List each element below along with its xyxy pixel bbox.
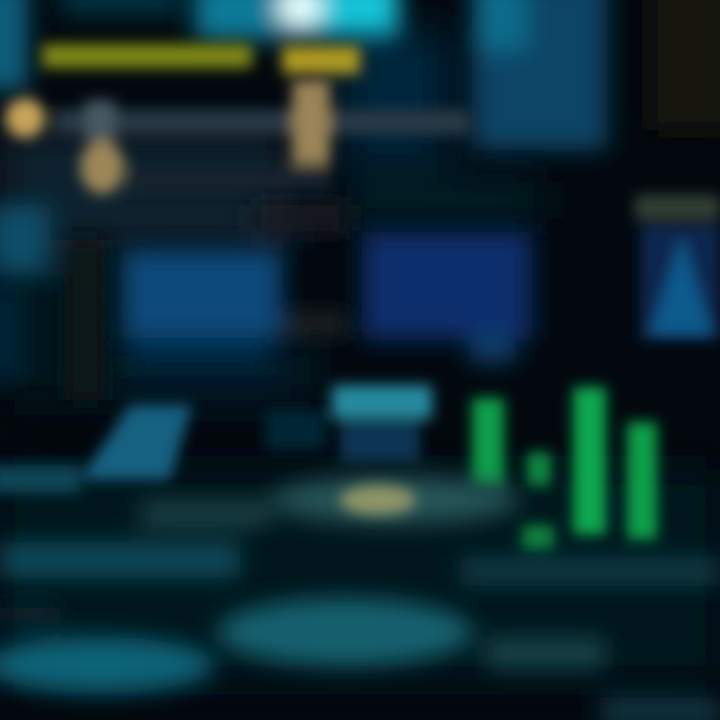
panel: left blue [122,205,350,365]
heading bar [42,44,360,74]
bar chart [472,387,657,551]
middle platform [0,476,720,585]
teal cards [0,385,432,493]
left blue strip [0,205,105,400]
top glow header [0,0,720,150]
subtitle band [5,80,470,194]
panel: centre blue [362,232,532,363]
panel: right triangle [635,195,720,340]
platform highlight [340,485,416,515]
lower platforms [0,598,720,720]
